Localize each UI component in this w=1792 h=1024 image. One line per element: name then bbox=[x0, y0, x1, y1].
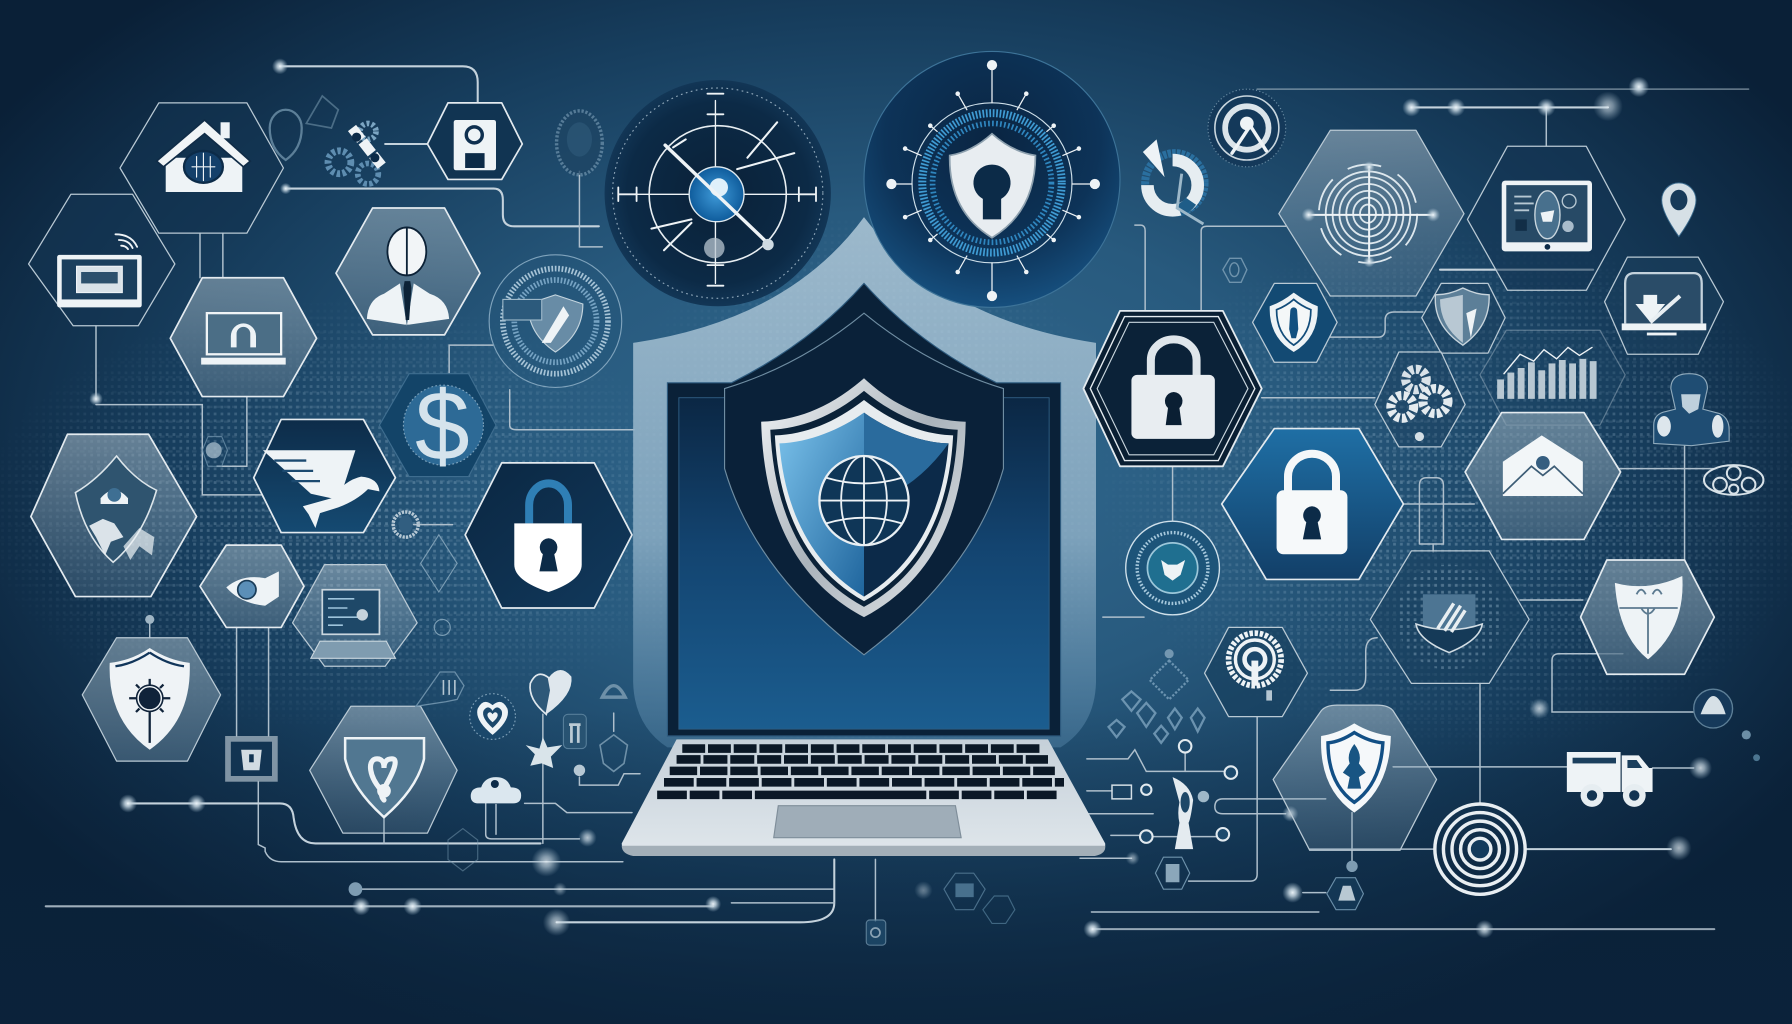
hexagon: padlock on black bbox=[1083, 311, 1262, 466]
faint hexagon icon bbox=[1223, 258, 1247, 282]
hexagon: monitor and wifi bbox=[29, 194, 175, 326]
small icon: ring bbox=[393, 512, 418, 537]
laptop display panel bbox=[679, 398, 1049, 729]
hexagon: blue keeper shield bbox=[1273, 705, 1437, 850]
hexagon: heart shield bbox=[310, 672, 464, 833]
hexagon: person in suit bbox=[336, 208, 480, 335]
dark backing shield bbox=[725, 313, 1003, 655]
hexagon: padlock on blue bbox=[1222, 429, 1403, 579]
connector lines: left network bbox=[96, 66, 640, 862]
circular emblem: blue ring bbox=[1126, 521, 1219, 615]
hexagon: white crest shield bbox=[1581, 560, 1714, 674]
small icons: gears and links bbox=[270, 96, 382, 184]
connector lines: right network bbox=[1085, 89, 1749, 893]
hexagon: gears bbox=[1375, 352, 1465, 447]
hexagon: tablet bbox=[1467, 146, 1625, 290]
small icon: hexagon with ring bbox=[202, 437, 227, 466]
hexagon: envelope bbox=[1465, 413, 1621, 539]
glow nodes: top right bbox=[1402, 77, 1649, 121]
dot matrix texture: right bbox=[1146, 262, 1786, 724]
bottom centre chips bbox=[866, 873, 1015, 945]
dot matrix texture: left bbox=[16, 324, 633, 703]
circle emblem: crosshair with crossed tools bbox=[605, 80, 831, 306]
hexagon: bar chart bbox=[1480, 330, 1625, 425]
small icon: microphone shield bbox=[557, 111, 602, 175]
pale shield backdrop bbox=[633, 217, 1096, 747]
small circular bell icon bbox=[1694, 689, 1733, 728]
hexagon: dotted shield bbox=[1370, 551, 1529, 683]
cloud icon bbox=[471, 777, 521, 803]
knot icon bbox=[1704, 465, 1763, 495]
small hexagon icon bottom bbox=[1327, 878, 1363, 910]
hooded person icon bbox=[1654, 374, 1729, 446]
square chip icon bbox=[225, 736, 278, 782]
hexagon: laptop with keyhole bbox=[170, 278, 317, 397]
circular emblem: tech ring bbox=[489, 255, 622, 387]
hexagon: small shield bbox=[1422, 283, 1505, 353]
circle emblem: keyhole shield with spokes bbox=[864, 51, 1120, 307]
hexagon: dollar emblem bbox=[379, 370, 496, 480]
laptop deck bbox=[622, 739, 1105, 853]
trackpad bbox=[774, 806, 961, 838]
laptop screen bbox=[667, 283, 1061, 736]
broken ring icon bbox=[1143, 139, 1205, 224]
glow nodes: left network bbox=[89, 58, 721, 936]
hexagon: laptop with check bbox=[1605, 257, 1723, 354]
keyboard bbox=[657, 749, 1071, 795]
heart icons bbox=[470, 670, 627, 776]
hexagon: eye bbox=[200, 545, 304, 627]
hexagon: padlock with shield body bbox=[465, 463, 632, 608]
glow nodes: right network bbox=[1083, 698, 1760, 938]
circuit glyphs bbox=[1112, 740, 1298, 889]
hexagon: fingerprint bbox=[1279, 130, 1464, 296]
hexagon: laptop screen bbox=[293, 565, 417, 666]
hexagon: bird emblem bbox=[254, 419, 395, 533]
connector lines: bottom bbox=[46, 858, 1714, 929]
round target emblem bbox=[1208, 89, 1286, 167]
concentric target bbox=[1435, 804, 1525, 894]
scattered diamond icons bbox=[1109, 649, 1205, 743]
truck bbox=[1567, 752, 1653, 807]
silver shield with globe bbox=[761, 378, 966, 617]
hexagon: id badge bbox=[427, 103, 522, 179]
hexagon: blue shield bbox=[1253, 283, 1337, 362]
laptop bbox=[622, 283, 1105, 856]
hexagon: house icon bbox=[120, 103, 283, 233]
hexagon: world shield bbox=[31, 434, 197, 597]
map pin bbox=[1662, 183, 1696, 237]
hexagon: dollar emblem: $ bbox=[415, 370, 470, 480]
small hex outlines bbox=[421, 535, 478, 871]
hexagon: shield with sun bbox=[82, 615, 221, 761]
hexagon: gear target bbox=[1205, 627, 1307, 717]
